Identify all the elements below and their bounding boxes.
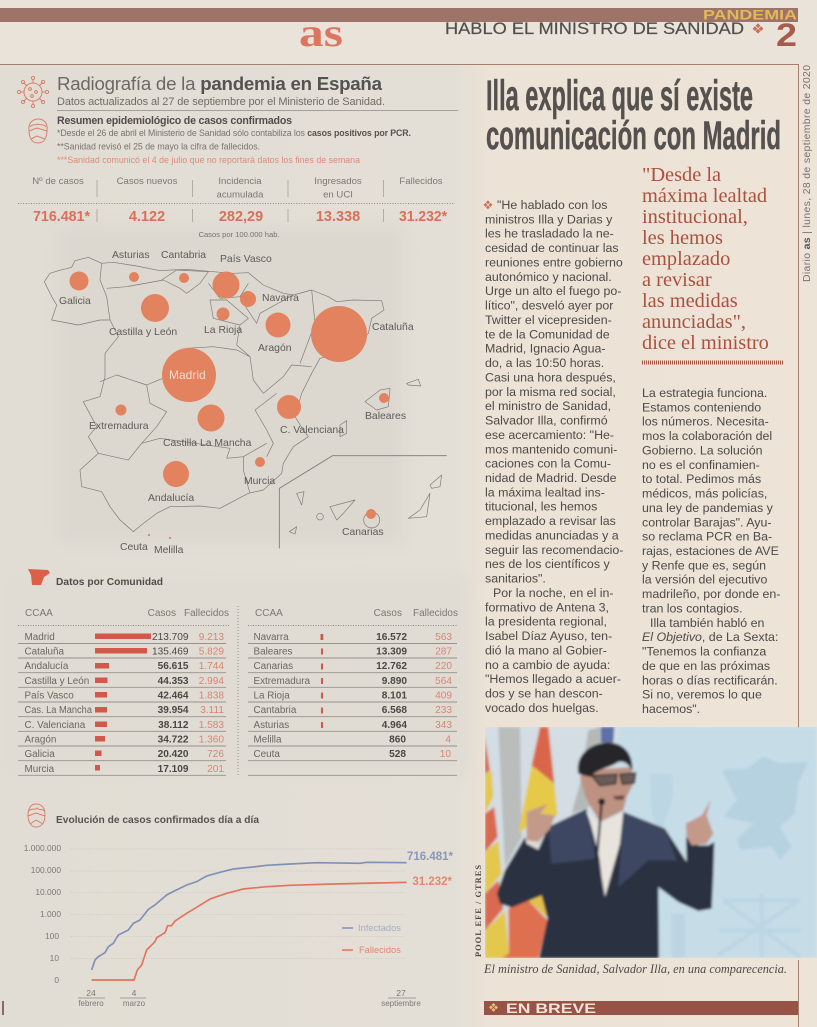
article column 2: La estrategia funciona. [642,386,767,400]
article column 1: dió la mano al Gobier- [485,643,607,657]
table: left: Cataluña [24,646,65,658]
table: right: 13.309 [376,646,407,658]
article column 2: de que en las próximas [642,659,770,673]
table: left [18,608,229,775]
article column 1: por la misma red social, [485,385,616,399]
table: left: Andalucía [24,661,69,672]
article column 1: "Hemos llegado a acuer- [485,672,621,686]
article column 1: reuniones entre gobierno [485,256,623,270]
article column 1: les he trasladado la ne- [485,227,614,241]
flags [485,727,614,958]
glasses [592,773,636,786]
article column 1: sanitarios". [485,572,546,586]
x axis labels: septiembre [381,999,421,1008]
x axis labels: marzo [123,999,146,1008]
article column 1: emplazado a revisar las [485,514,616,528]
pull quote: les hemos [642,227,723,249]
table: right: 8.101 [382,690,407,702]
jacket [497,809,714,958]
en breve band [484,1000,798,1016]
article column 1: la máxima lealtad ins- [485,485,605,499]
table: right: 343 [435,720,452,731]
y axis labels: 1.000.000 [24,843,61,853]
table: left: 39.954 [158,705,189,716]
table: right: 12.762 [376,661,407,672]
photo caption: El ministro de Sanidad, Salvador Illa, en una comparecencia. [483,962,787,976]
map labels: Aragón [258,343,292,354]
map labels: Navarra [262,293,299,304]
table: right: Casos [374,608,402,619]
table: right: Ceuta [254,749,280,760]
side date line: Diario as | lunes, 28 de septiembre de 2020 [802,65,813,282]
key figures: 282,29 [219,209,263,225]
article column 2: Gobierno. La solución [642,444,763,458]
key figures: 4.122 [129,209,165,225]
y axis labels: 0 [54,975,59,985]
section heading: HABLO EL MINISTRO DE SANIDAD [445,19,744,38]
en breve band: EN BREVE [506,1000,596,1016]
article column 1: autonómico y nacional. [485,270,612,284]
x axis labels: febrero [78,999,104,1008]
key figures: acumulada [217,190,264,200]
table: right: 10 [440,749,451,760]
summary notes: **Sanidad revisó el 25 de mayo la cifra de fallecidos. [57,142,260,152]
article column 2: tran los contagios. [642,602,743,616]
article column 1: te de la Comunidad de [485,327,610,341]
table: right: 6.568 [382,705,407,716]
table: left: Castilla y León [24,676,89,687]
article column 1: Salvador Illa, confirmó [485,414,608,428]
map labels: C. Valenciana [280,425,344,436]
article column 1: formativo de Antena 3, [485,600,609,614]
microphone [597,802,602,860]
y axis labels [24,843,61,985]
coat of arms watermarks [650,757,808,958]
table: right: 4.964 [382,720,407,731]
article column 2: hacemos". [642,702,700,716]
table: right: La Rioja [254,690,290,702]
map of Spain [44,250,447,556]
article column 2: horas o días rectificarán. [642,673,778,687]
section tag: Pandemia: PANDEMIA [703,6,797,22]
article column 2: El Objetivo, de La Sexta: [642,630,778,644]
table: right: 564 [435,676,452,687]
article column 2: rajas, estaciones de AVE [642,544,779,558]
icon: virus [17,76,49,108]
pull quote: dice el ministro [642,332,769,354]
map labels: La Rioja [204,325,242,336]
x axis labels: 4 [132,988,137,998]
value label: infected: 716.481* [407,851,454,863]
article column 1: mos mantenido comuni- [485,442,617,456]
value label: deaths: 31.232* [412,876,453,888]
summary notes: *Desde el 26 de abril el Ministerio de Sanidad sólo contabiliza los casos positivos por PCR. [57,128,411,138]
page number: 2 [776,17,797,53]
mouth [613,795,624,800]
cuff [525,840,538,850]
shirt [586,810,623,897]
key figures [18,176,455,239]
table: right: Cantabria [254,705,297,716]
summary notes: ***Sanidad comunicó el 4 de julio que no reportará datos los fines de semana [57,155,360,165]
table: left: País Vasco [24,690,74,702]
y axis labels: 1.000 [40,909,61,919]
article column 2 [642,386,780,716]
map labels: Extremadura [89,421,149,432]
article column 1: seguir las recomendacio- [485,543,623,557]
pull quote: emplazado [642,248,730,270]
map labels: Cantabria [161,250,206,261]
map labels [59,250,414,556]
article column 2: to total. Pedimos más [642,472,761,486]
panel: data by region [18,569,458,776]
photo credit: POOL EFE / GTRES [474,865,483,957]
article column 1: lítico", desveló ayer por [485,299,613,313]
y axis labels: 100.000 [31,865,61,875]
map labels: Asturias [112,250,150,261]
map labels: Murcia [244,476,275,487]
article column 1: Casi una hora después, [485,370,616,384]
article column 1: "He hablado con los [497,198,607,212]
neck and face [580,767,633,822]
article column 1: vocado dos huelgas. [485,701,599,715]
pull quote [642,164,783,362]
hair [578,743,632,777]
map labels: Andalucía [148,493,194,504]
table: left: 726 [207,749,224,760]
table: right: 16.572 [376,632,407,643]
table: right: Baleares [254,646,293,658]
table: left: 3.111 [200,705,224,716]
article column 1: la presidenta regional, [485,615,607,629]
table: left: 1.583 [199,720,224,731]
article column 1: no a cambio de ayuda: [485,658,610,672]
icon: diamond ornament [753,23,763,34]
line: infected [92,862,407,970]
title: Radiografía de la pandemia en España [57,73,383,94]
map labels: Cataluña [372,322,414,333]
chart heading: Evolución de casos confirmados día a día [56,815,259,826]
article column 2: "Tenemos la confianza [642,644,766,658]
article column 2: una ley de pandemias y [642,501,774,515]
table: right: 409 [435,690,452,702]
key figures: 716.481* [33,209,90,225]
summary heading: Resumen epidemiológico de casos confirmados [57,115,292,127]
headline [486,72,781,158]
article column 1 [483,198,623,715]
table: left: 20.420 [158,749,189,760]
subtitle: Datos actualizados al 27 de septiembre por el Ministerio de Sanidad. [57,96,385,108]
article column 1: Por la noche, en el in- [493,586,614,600]
header band [0,6,798,55]
table: left: 213.709 [152,632,189,643]
panel: pandemic radiography [17,73,458,239]
legend: Infectados [358,923,401,933]
table: left: 9.213 [199,632,224,643]
table: right: Asturias [254,720,289,731]
hands [527,804,555,842]
table: left: 201 [207,764,224,775]
x axis labels: 24 [86,988,96,998]
table: right: 4 [445,734,451,746]
table: left: Casos [148,608,176,619]
key figures: Casos por 100.000 hab. [198,230,280,239]
article column 2: médicos, más policías, [642,486,767,500]
article column 1: nidad de Madrid. Desde [485,471,617,485]
key figures: en UCI [323,190,353,200]
table: left: Aragón [24,734,56,746]
map labels: Canarias [342,527,384,538]
table: left: 44.353 [158,676,189,687]
article column 1: ese acercamiento: "He- [485,428,614,442]
map labels: Castilla La Mancha [163,438,252,449]
article column 2: la versión del ejecutivo [642,573,767,587]
table: right: 233 [435,705,452,716]
key figures: Ingresados [314,176,362,187]
article column 2: no es el confinamien- [642,458,760,472]
panel: daily evolution chart [2,804,454,1015]
table: right: Extremadura [254,676,311,687]
pull quote: las medidas [642,290,738,312]
table: left: 5.829 [199,646,224,658]
map circles [70,272,389,539]
pull quote: máxima lealtad [642,185,767,207]
map labels: Ceuta [120,542,148,553]
article column 2: controlar Barajas". Ayu- [642,515,772,529]
icon: Spain silhouette [28,569,50,585]
x axis labels [78,988,421,1008]
article column 1: dos y se han descon- [485,686,603,700]
article column 2: y Renfe que es, según [642,558,766,572]
article column 1: el ministro de Sanidad, [485,399,611,413]
table: left: 17.109 [158,764,189,775]
table: left: 42.464 [158,690,189,702]
key figures: Casos nuevos [117,176,178,187]
table: left: CCAA [25,608,53,619]
table: right: Melilla [254,734,282,746]
pull quote: institucional, [642,206,748,228]
table: left: Cas. La Mancha [24,705,92,716]
article column 1: Urge un alto el fuego po- [485,284,621,298]
legend: Fallecidos [359,945,401,955]
table: left: C. Valenciana [24,720,86,731]
table: left: Madrid [24,632,55,643]
icon: mask face [29,119,47,143]
map labels: Baleares [365,411,406,422]
article column 2: madrileño, por donde en- [642,587,780,601]
article column 1: Madrid, Ignacio Agua- [485,342,606,356]
article column 1: do, a las 10:50 horas. [485,356,604,370]
table: right: CCAA [255,608,283,619]
table: left: 56.615 [158,661,189,672]
article column 1: titucional, les hemos [485,500,597,514]
key figures: Fallecidos [399,176,443,187]
line: deaths [92,882,407,980]
icon: band ornament [489,1003,498,1012]
table heading: Datos por Comunidad [56,577,163,588]
table: left: 2.994 [199,676,224,687]
table: right [248,608,458,775]
y axis labels: 100 [45,931,59,941]
y axis labels: 10 [50,953,59,963]
article column 1: nes de los científicos y [485,557,610,571]
table: right: 220 [435,661,452,672]
photo: Salvador Illa [485,727,817,958]
article column 1: caciones con la Comu- [485,457,611,471]
article column 1: Twitter el vicepresiden- [485,313,612,327]
article column 2: los números. Necesita- [642,415,769,429]
key figures: 31.232* [399,209,447,225]
table: right: 563 [435,632,452,643]
pull quote: anunciadas", [642,311,746,333]
table: right: 860 [389,734,406,746]
table: left: 38.112 [158,720,189,731]
table: left: 34.722 [158,734,189,746]
map labels: Madrid [169,368,206,382]
table: right: 9.890 [382,676,407,687]
table: left: 1.360 [199,734,224,746]
summary notes [57,128,411,165]
y axis labels: 10.000 [35,887,61,897]
article column 2: Si no, veremos lo que [642,688,762,702]
table: left: Galicia [24,749,55,760]
x axis labels: 27 [396,988,406,998]
table: left: 1.838 [199,690,224,702]
article column 2: mos la colaboración del [642,429,772,443]
logo: as: as [299,10,343,55]
article column 1: medidas anunciadas y a [485,528,619,542]
pull quote: a revisar [642,269,712,291]
map labels: País Vasco [220,254,272,265]
table: right: Canarias [254,661,293,672]
table: left: Fallecidos [184,608,229,619]
table: right: 287 [435,646,452,658]
pull quote: "Desde la [642,164,721,186]
table: left: 1.744 [199,661,224,672]
article column 1: Isabel Díaz Ayuso, ten- [485,629,612,643]
icon: bullet diamond [483,200,492,209]
article column 1: ministros Illa y Darias y [485,212,613,226]
table: right: 528 [389,749,406,760]
key figures: 13.338 [316,209,360,225]
map labels: Melilla [154,545,184,556]
table: right: Navarra [254,632,289,643]
table: right: Fallecidos [413,608,458,619]
map labels: Castilla y León [109,327,177,338]
legend [342,923,401,955]
map outlines [44,257,447,548]
key figures: Nº de casos [32,176,84,187]
article column 2: so reclama PCR en Ba- [642,530,772,544]
table: left: 135.469 [152,646,189,658]
icon: mask face small [28,804,45,827]
table: left: Murcia [24,764,55,775]
article column 1: cesidad de continuar las [485,241,619,255]
key figures: Incidencia [218,176,262,187]
map labels: Galicia [59,296,91,307]
article column 2: Estamos conteniendo [642,400,761,414]
article column 2: Illa también habló en [650,616,764,630]
